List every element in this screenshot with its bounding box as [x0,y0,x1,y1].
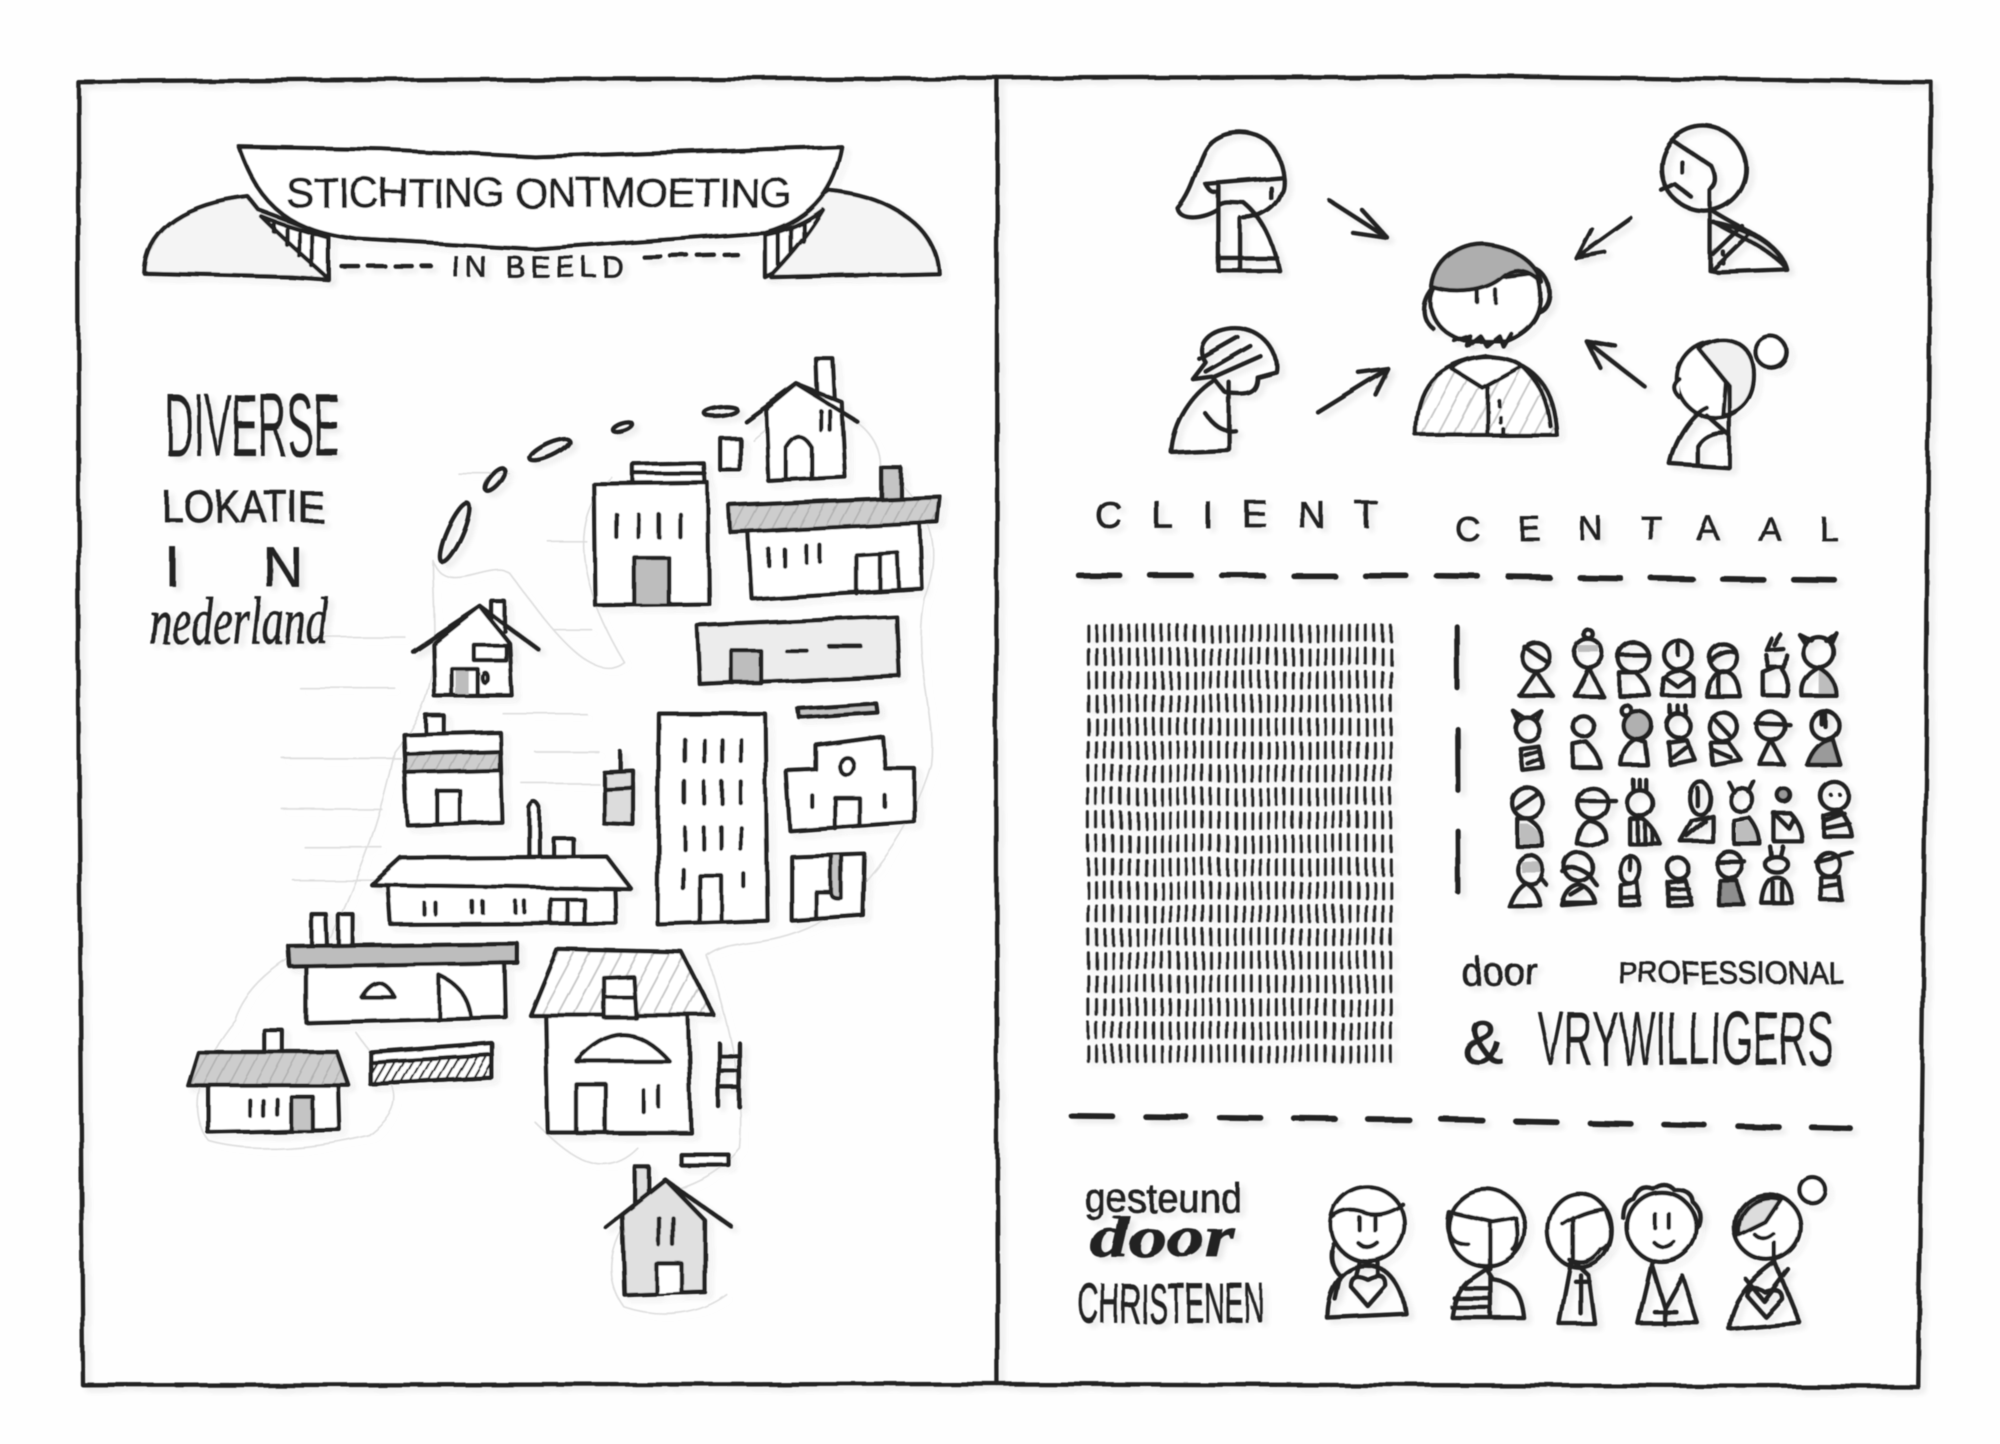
text: & vrywilligers: & [1462,1009,1503,1077]
person: bottom left with striped hair [1171,328,1276,452]
title banner [144,147,939,284]
building: office with roof box [594,463,709,605]
small grey block with antenna [604,752,633,825]
left ribbon wing [144,197,328,280]
divider: lower dashes [1072,1116,1851,1129]
heading: diverse lokatie in nederland [149,375,340,658]
text: gesteund door christenen: door [1091,1204,1236,1269]
text: gesteund door christenen: gesteund [1084,1175,1241,1221]
person: bottom right with bun [1669,337,1787,467]
building: long factory [372,803,631,924]
building: long low shed [697,617,899,684]
person: top left with long hair [1178,132,1284,271]
heading: client centaal: CENTAAL [1455,510,1838,548]
right ribbon wing [765,190,939,277]
people: christian supporters [1327,1177,1825,1329]
person: striped shirt [1447,1190,1525,1318]
arrow: bottom right to centre [1586,341,1644,386]
text: door professional [1461,950,1844,993]
heading: client centaal [1095,493,1838,548]
row four [1508,846,1852,905]
arrow: bottom left to centre [1318,369,1388,412]
panel: Netherlands map with buildings [188,359,940,1314]
text: door professional: PROFESSIONAL [1618,956,1844,990]
islands [435,405,737,565]
arrow: top right to centre [1576,218,1631,258]
row two [1513,705,1840,770]
text: & vrywilligers [1462,997,1834,1082]
person: centre client [1416,244,1557,435]
ladder [719,1043,739,1107]
right fold [765,209,822,277]
building: flat with two chimneys [289,914,517,1023]
building: big house [530,950,714,1132]
bar above church [798,703,877,718]
building: church [787,737,914,831]
house: west coast [413,601,539,696]
text: gesteund door christenen [1078,1175,1264,1335]
person: bun and heart pendant [1729,1177,1825,1329]
small rectangle [720,438,739,470]
row three [1512,780,1852,846]
subtitle: IN BEELD [452,251,623,284]
person: with cross necklace [1548,1194,1612,1324]
title text: STICHTING ONTMOETING [286,169,792,216]
building: middle left with band [404,715,502,825]
nederland: nederland [149,585,329,658]
house: bottom left [188,1030,349,1132]
LOKATIE: LOKATIE [162,483,324,532]
left fold [261,216,328,278]
divider: upper dashes [1079,576,1851,581]
arrow: top left to centre [1330,200,1387,237]
hatched bar [370,1043,492,1084]
small bar [681,1154,728,1164]
text: DIVERSE [165,375,340,475]
IN: IN [165,535,303,598]
divider: vertical dashes [1457,627,1458,913]
row one [1520,630,1837,696]
house: top right with chimney [746,359,857,481]
text: door professional: door [1461,950,1538,993]
building: tall tower [658,714,768,924]
person: braid and heart [1327,1187,1406,1318]
person: curly hair smiling [1623,1184,1700,1324]
building: small U block [792,854,865,921]
panel: client centraal [1095,126,1838,548]
faint map outline and water lines [198,410,934,1314]
chart: tick mark matrix of clients [1084,622,1395,1067]
heading: client centaal: CLIENT [1095,493,1378,536]
grid: small people [1508,630,1852,905]
building: flat roof with double door [729,467,940,599]
text: gesteund door christenen: CHRISTENEN [1078,1272,1264,1335]
subtitle dashes [341,254,737,266]
person: top right [1662,126,1787,272]
banner main shape [239,147,842,249]
house: bottom south [605,1167,732,1295]
